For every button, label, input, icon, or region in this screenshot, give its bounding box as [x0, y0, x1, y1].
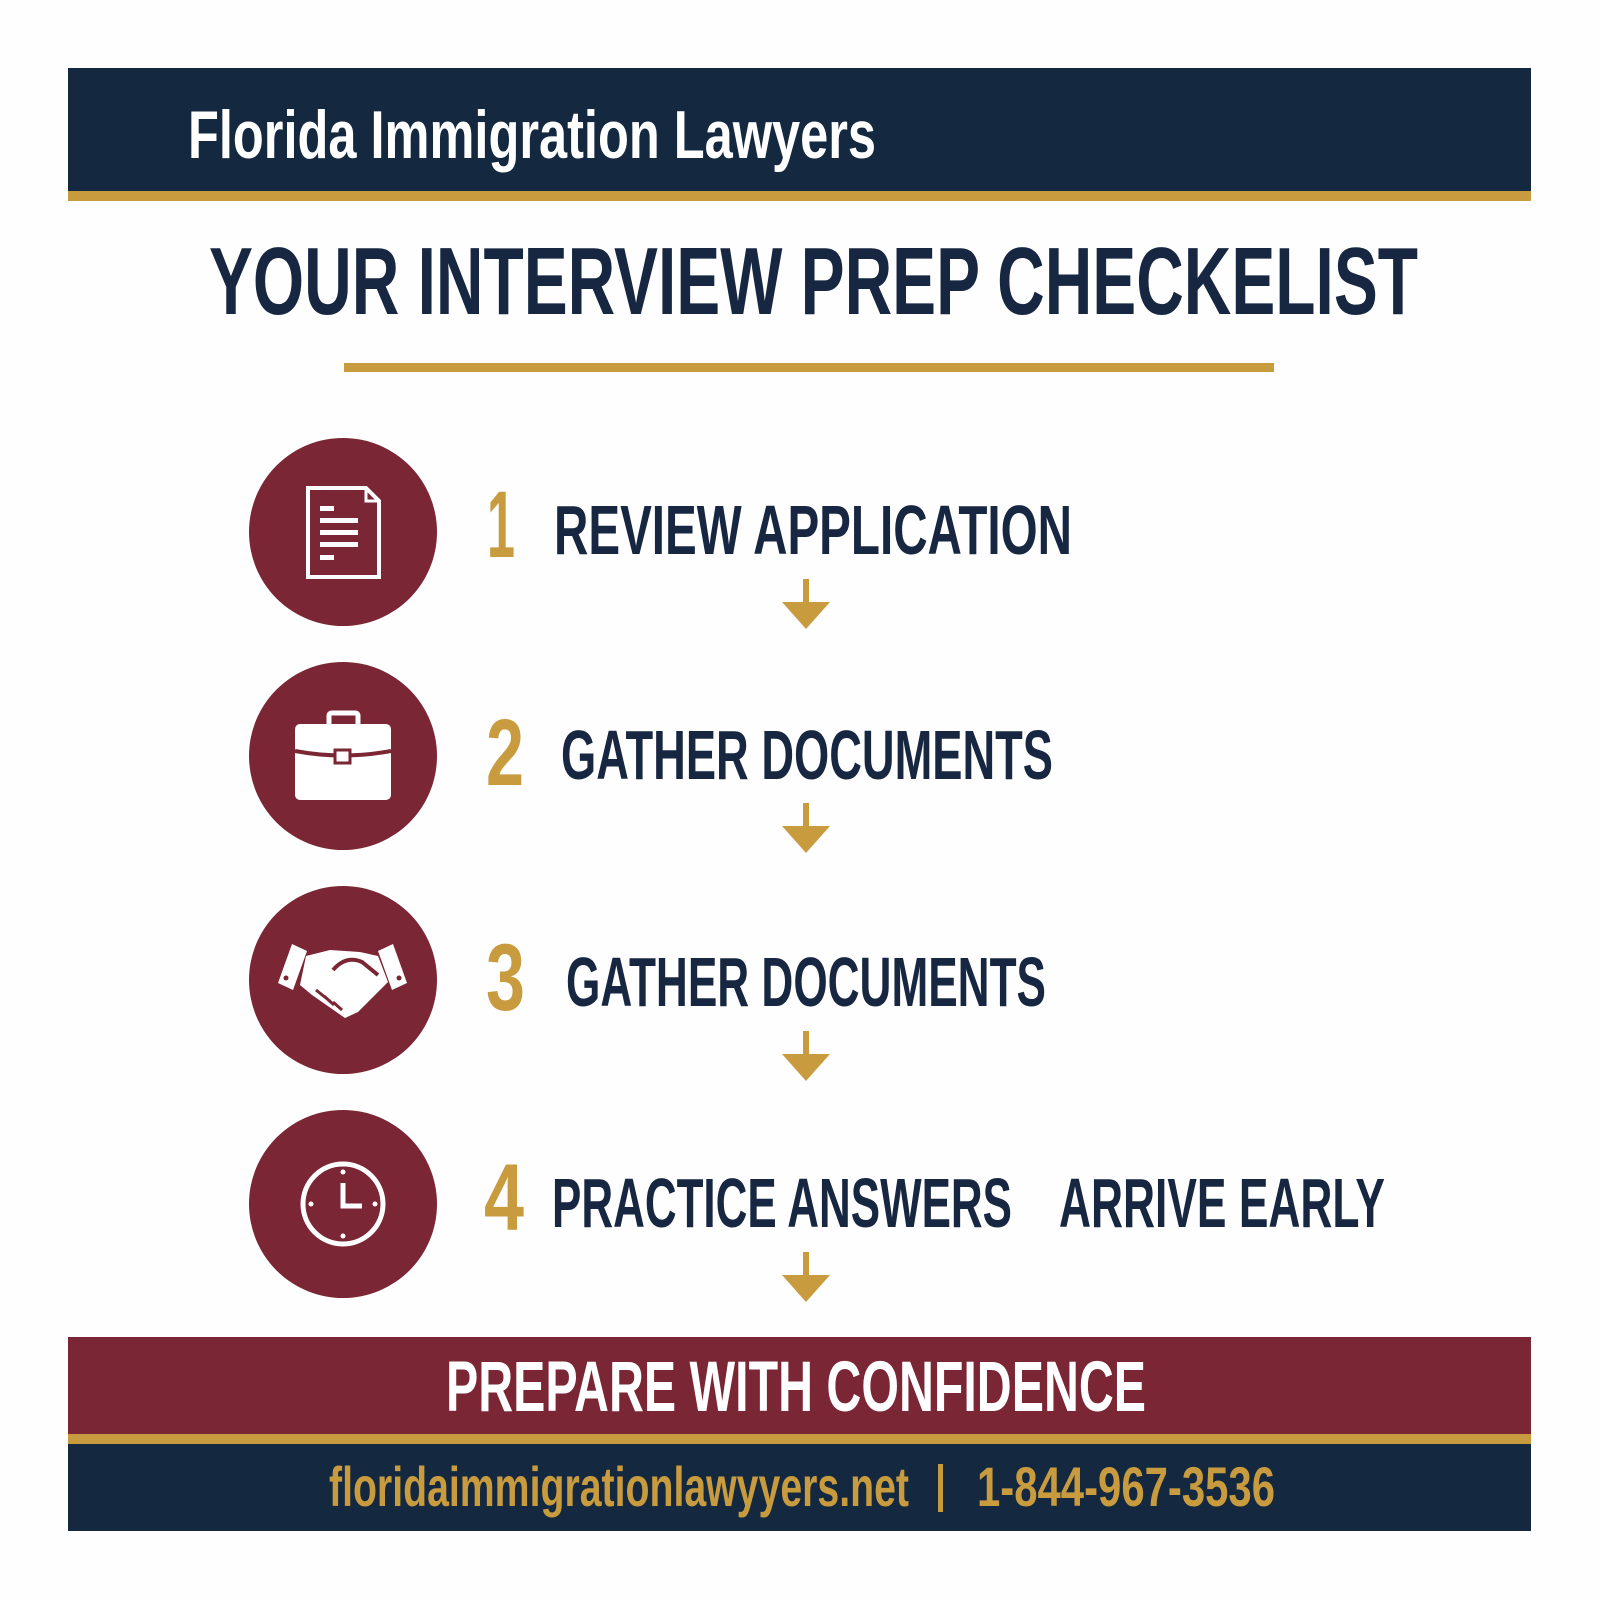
footer banner: [68, 1337, 1531, 1531]
step 2: [249, 662, 1053, 850]
icon: document: [249, 438, 437, 626]
step 3 label: GATHER DOCUMENTS: [566, 943, 1046, 1021]
number 3: 3: [486, 925, 525, 1031]
icon: clock: [249, 1110, 437, 1298]
number 2: 2: [486, 700, 524, 806]
header title: Florida Immigration Lawyers: [188, 97, 876, 173]
footer banner: 1-844-967-3536: [977, 1455, 1275, 1518]
step 3: [249, 886, 1046, 1074]
title underline: [344, 363, 1274, 372]
arrow 4: [782, 1252, 830, 1302]
step 2 label: GATHER DOCUMENTS: [561, 716, 1053, 794]
footer contact: floridaimmigrationlawyyers.net: [329, 1455, 909, 1518]
header banner: [68, 68, 1531, 201]
footer slogan: PREPARE WITH CONFIDENCE: [446, 1348, 1146, 1427]
number 1: 1: [487, 472, 515, 578]
icon: briefcase: [249, 662, 437, 850]
arrow 3: [782, 1031, 830, 1081]
step 4 label: PRACTICE ANSWERS: [552, 1164, 1012, 1242]
arrow 1: [782, 579, 830, 629]
arrow 2: [782, 803, 830, 853]
step 1: [249, 438, 1072, 626]
step 4: [249, 1110, 1385, 1298]
step 4 label extra: ARRIVE EARLY: [1059, 1164, 1385, 1242]
number 4: 4: [484, 1145, 524, 1251]
step 1 label: REVIEW APPLICATION: [554, 491, 1072, 569]
icon: handshake: [249, 886, 437, 1074]
